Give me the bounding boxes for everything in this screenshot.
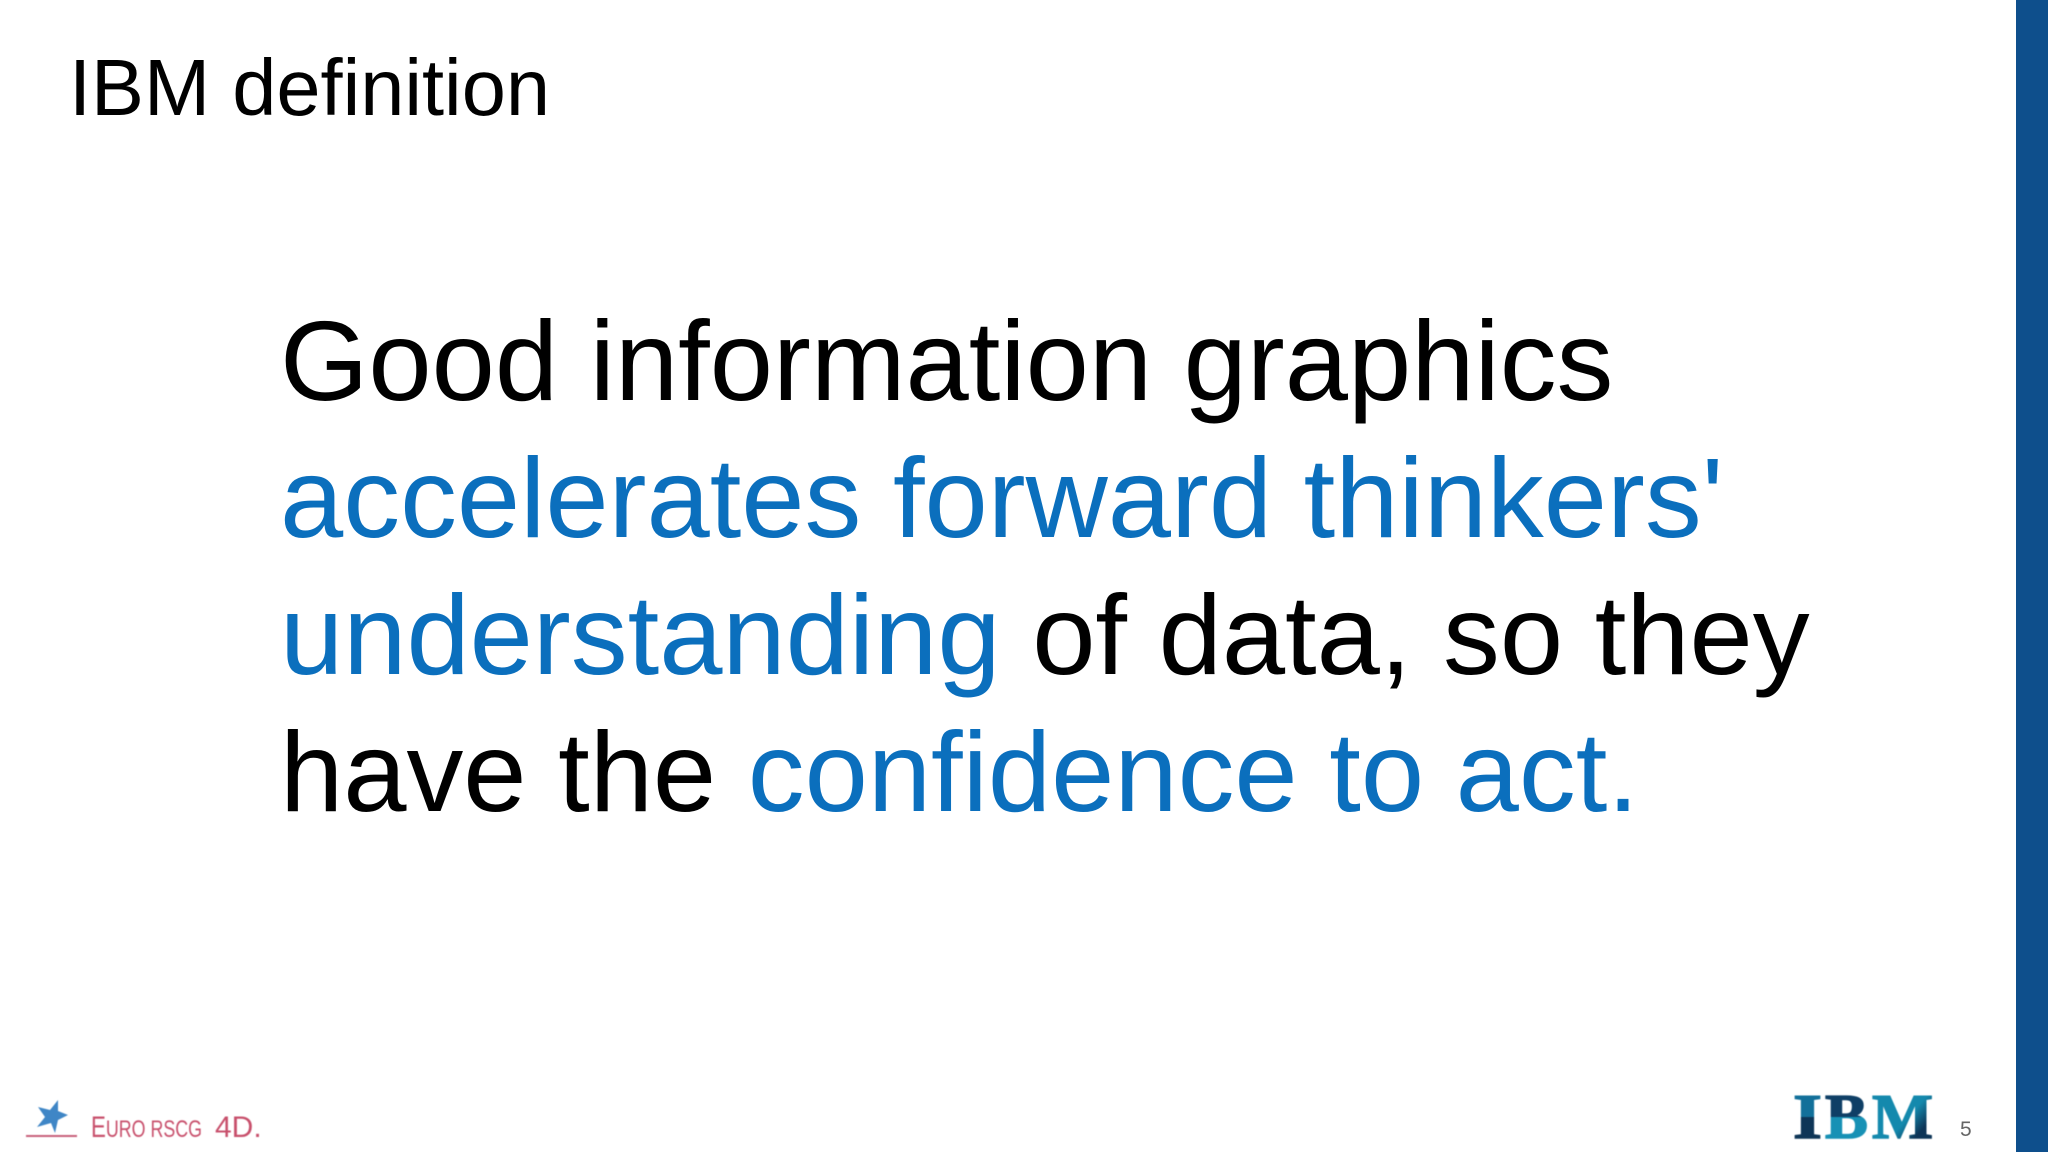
logo: IBM <box>1793 1092 1933 1142</box>
logo text: EURO RSCG <box>91 1111 202 1144</box>
logo: Euro RSCG 4D <box>25 1100 262 1144</box>
line 2: accelerates forward thinkers' <box>280 435 1723 562</box>
page number: 5 <box>1960 1118 1972 1141</box>
underline <box>26 1135 77 1137</box>
line 4: have the confidence to act. <box>280 709 1639 836</box>
main statement text block <box>280 298 1810 836</box>
right side bar <box>2016 0 2048 1152</box>
icon: star <box>37 1100 68 1133</box>
title: IBM definition <box>69 43 550 132</box>
logo text 4D: 4D. <box>215 1111 262 1144</box>
line 1: Good information graphics <box>280 298 1613 425</box>
line 3: understanding of data, so they <box>280 572 1810 699</box>
